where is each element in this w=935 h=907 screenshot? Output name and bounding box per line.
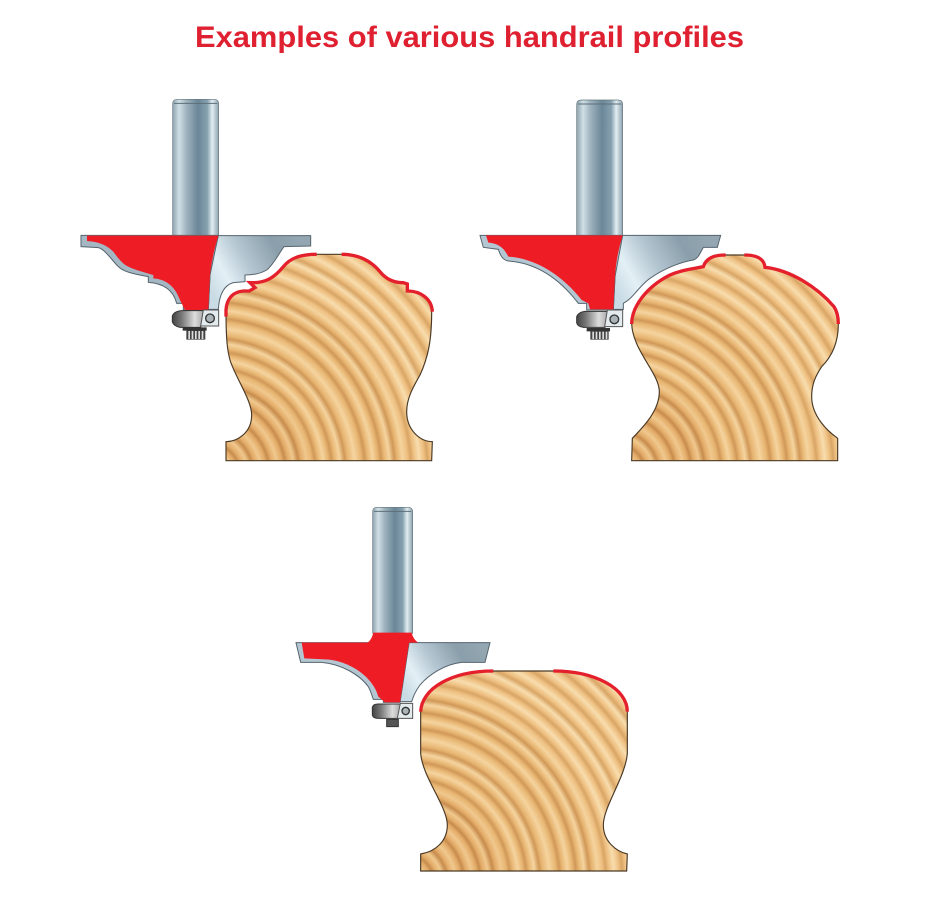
wood handrail profile 3	[421, 671, 627, 871]
panel: profile example 1 (top left)	[81, 99, 432, 461]
icon: router bit 3	[296, 507, 490, 727]
icon: router bit 1	[81, 99, 311, 339]
icon: router bit 2	[480, 100, 721, 339]
wood handrail profile 1	[226, 254, 432, 461]
wood handrail profile 2	[632, 255, 838, 461]
title: Examples of various handrail profiles	[195, 21, 744, 54]
panel: profile example 3 (bottom centre)	[296, 507, 627, 871]
panel: profile example 2 (top right)	[480, 100, 838, 461]
